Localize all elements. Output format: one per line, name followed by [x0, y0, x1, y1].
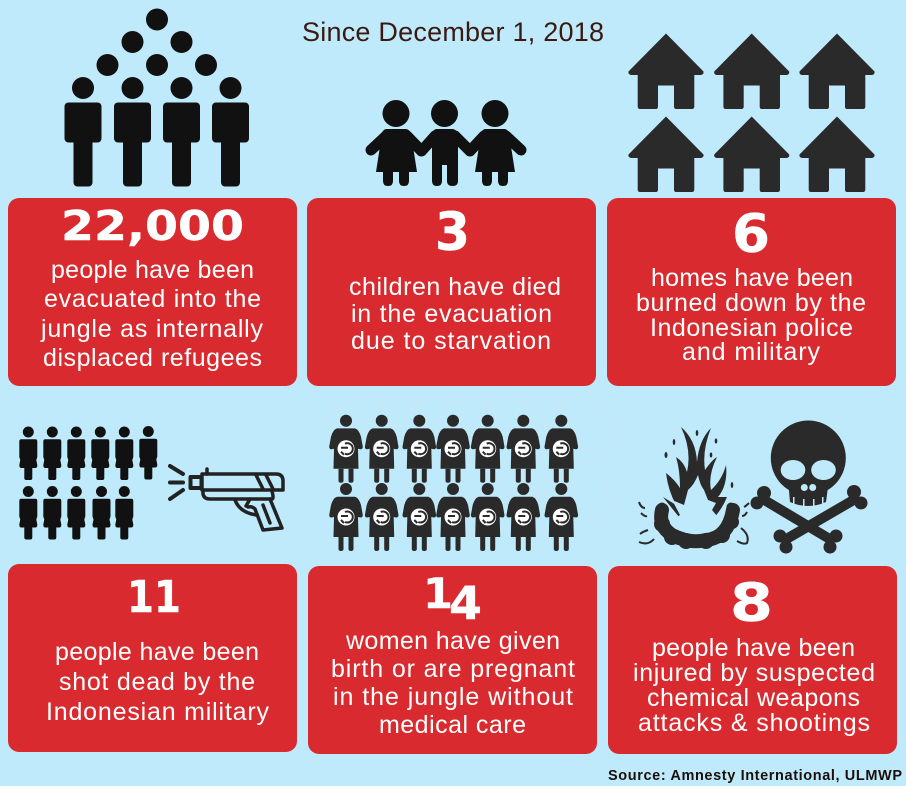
text: injured description: people have been — [652, 634, 855, 662]
icon: six houses — [628, 34, 875, 192]
number: 3: 3 — [435, 202, 470, 263]
text: homes description: and military — [682, 338, 820, 366]
text: homes description — [636, 264, 866, 366]
text: shot dead description: shot dead by the — [59, 668, 255, 696]
text: women description: birth or are pregnant — [331, 655, 575, 683]
text: women description: women have given — [345, 627, 560, 655]
text: children description: children have died — [349, 273, 561, 301]
text: injured description: chemical weapons — [647, 684, 860, 712]
source line: Source: Amnesty International, ULMWP — [608, 768, 902, 784]
text: shot dead description: people have been — [55, 638, 259, 666]
number: 8: 8 — [730, 573, 773, 634]
text: women description: in the jungle without — [333, 683, 573, 711]
text: homes description: homes have been — [651, 264, 853, 292]
panel: 11 shot dead — [8, 564, 297, 752]
panel: 6 homes — [607, 198, 896, 386]
icon: gun firing — [170, 466, 283, 530]
text: evacuated description — [40, 256, 264, 372]
text: injured description: attacks & shootings — [638, 709, 870, 737]
text: children description — [349, 273, 561, 355]
panel: 3 children — [307, 198, 596, 386]
faint circular pattern behind pregnant women icons — [329, 398, 610, 532]
text: shot dead description — [46, 638, 270, 726]
icon: skull and crossbones — [750, 420, 868, 554]
icon: fire — [639, 427, 749, 549]
icon: three children holding hands — [371, 100, 521, 186]
icon: pregnant women — [329, 415, 578, 551]
number: 14 — [423, 569, 482, 630]
text: children description: due to starvation — [351, 327, 551, 355]
text: evacuated description: evacuated into the — [44, 285, 261, 313]
text: women description: medical care — [379, 711, 526, 739]
text: shot dead description: Indonesian military — [46, 698, 270, 726]
text: children description: in the evacuation — [351, 300, 552, 328]
panel: 8 injured — [608, 566, 897, 754]
number: 11: 11 — [127, 572, 181, 623]
text: evacuated description: displaced refugees — [43, 344, 262, 372]
number: 14: 4 — [449, 577, 482, 630]
panel: 22,000 evacuated — [8, 198, 297, 386]
text: women description — [331, 627, 575, 739]
number: 14: 1 — [423, 569, 453, 618]
icon: crowd of people — [64, 8, 249, 186]
number: 6: 6 — [732, 204, 770, 265]
text: evacuated description: jungle as internally — [40, 315, 264, 343]
title: Since December 1, 2018 — [302, 17, 604, 47]
text: injured description: injured by suspected — [633, 659, 875, 687]
number: 22,000: 22,000 — [61, 202, 244, 250]
text: homes description: Indonesian police — [650, 314, 853, 342]
text: injured description — [633, 634, 875, 737]
panel: 14 women — [308, 566, 597, 754]
text: evacuated description: people have been — [51, 256, 254, 284]
text: homes description: burned down by the — [636, 289, 866, 317]
icon: eleven people — [19, 426, 157, 540]
